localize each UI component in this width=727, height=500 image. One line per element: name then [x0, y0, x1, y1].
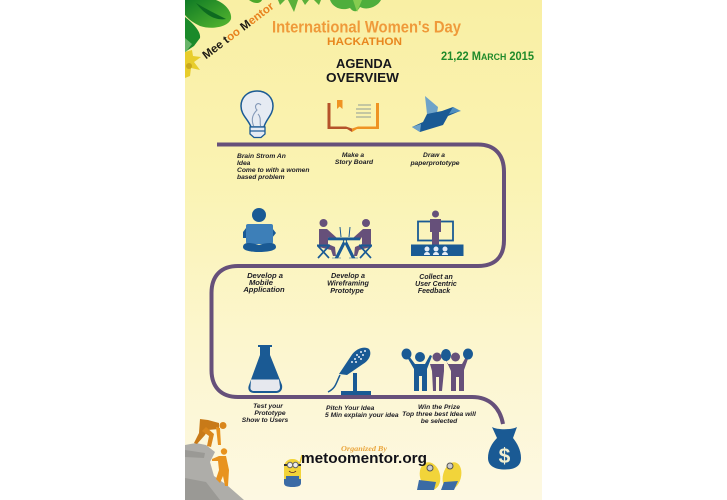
caption: wireframing prototype: Prototype: [330, 286, 364, 295]
caption: wireframing prototype: [327, 271, 370, 295]
caption: pitch idea: Pitch Your Idea: [326, 405, 375, 412]
decoration: top leaves: [185, 0, 381, 78]
logo: Mee too Mentor: Mee too Mentor: [201, 0, 277, 62]
caption: brain storm: based problem: [237, 174, 285, 181]
caption: user feedback: User Centric: [415, 281, 457, 288]
caption: win the prize: [402, 404, 476, 425]
caption: wireframing prototype: Wireframing: [327, 278, 370, 288]
heading: agenda overview: OVERVIEW: [326, 70, 400, 85]
icon: wireframing team: [317, 219, 372, 258]
organizer website: metoomentor.org: [301, 450, 427, 467]
caption: brain storm: [237, 153, 309, 181]
caption: story board: Make a: [342, 152, 364, 159]
caption: win the prize: Win the Prize: [418, 404, 460, 411]
caption: test prototype: [242, 403, 289, 424]
caption: mobile application: [242, 271, 285, 294]
caption: brain storm: Come to with a women: [237, 167, 309, 174]
date: 21,22 MARCH 2015: [441, 49, 534, 63]
caption: pitch idea: [325, 405, 399, 419]
caption: mobile application: Mobile: [249, 278, 274, 287]
caption: brain storm: Idea: [237, 160, 251, 167]
icon: money bag: [488, 427, 521, 470]
caption: story board: [335, 152, 374, 166]
illustration: right minions: [417, 460, 464, 492]
caption: win the prize: be selected: [421, 418, 458, 425]
caption: test prototype: Prototype: [254, 410, 286, 417]
subtitle: HACKATHON: [327, 36, 402, 48]
caption: user feedback: Collect an: [419, 274, 453, 281]
title: International Women's Day: [272, 18, 462, 36]
caption: wireframing prototype: Develop a: [331, 271, 365, 280]
caption: paper prototype: Draw a: [423, 152, 445, 159]
caption: pitch idea: 5 Min explain your idea: [325, 412, 399, 419]
icon: light bulb: [241, 91, 273, 138]
caption: brain storm: Brain Strom An: [237, 153, 286, 160]
caption: paper prototype: [409, 152, 460, 167]
organizer label: Organized By: [341, 444, 388, 453]
icon: story book: [328, 100, 379, 132]
icon: money bag: $: [499, 445, 511, 468]
caption: user feedback: [415, 274, 457, 295]
heading: agenda overview: AGENDA: [336, 56, 393, 71]
icon: prize winners: [402, 348, 473, 391]
heading: agenda overview: [326, 56, 400, 85]
caption: user feedback: Feedback: [418, 288, 451, 295]
caption: test prototype: Show to Users: [242, 417, 289, 424]
caption: win the prize: Top three best Idea will: [402, 411, 476, 418]
caption: story board: Story Board: [335, 159, 374, 166]
illustration: left minion: [284, 455, 302, 487]
timeline path: [212, 144, 504, 424]
caption: paper prototype: paperprototype: [409, 160, 460, 167]
caption: test prototype: Test your: [253, 403, 283, 410]
icon: developer with laptop: [243, 208, 276, 252]
icon: user feedback presentation: [411, 210, 464, 256]
icon: paper bird: [412, 96, 461, 132]
icon: test flask: [248, 345, 282, 393]
illustration: climbers on rock: [185, 419, 244, 500]
poster background: [185, 0, 542, 500]
icon: microphone: [328, 348, 371, 395]
caption: mobile application: Develop a: [247, 271, 283, 280]
caption: mobile application: Application: [242, 285, 285, 294]
